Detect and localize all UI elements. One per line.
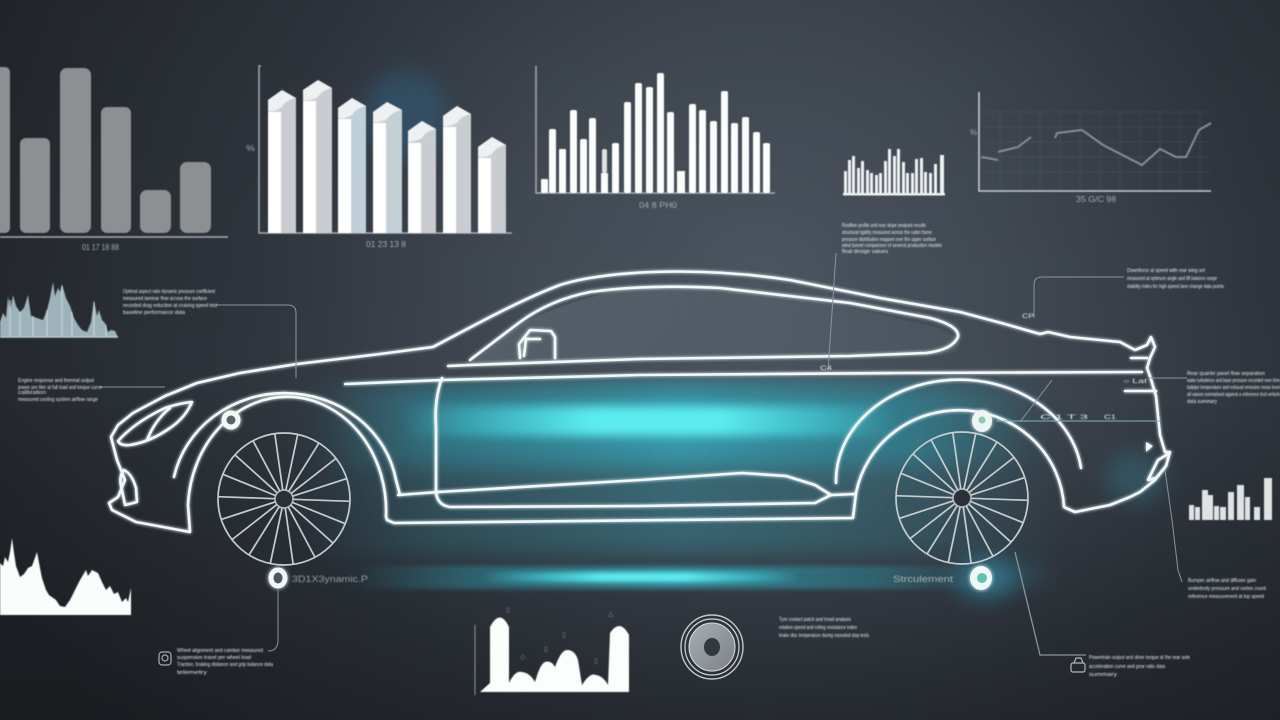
chart glow behind 3D bars [363, 70, 447, 160]
text block: bumper callout: Bumper airflow and diffuser gain [1188, 578, 1256, 584]
line chart with grid: 35 G/C 98 [1076, 195, 1117, 204]
rear details [1131, 357, 1147, 359]
hotspot: front arch [224, 413, 238, 427]
rear bumper glow [1105, 452, 1165, 504]
area chart: lower centre with icons: ▯ [544, 646, 548, 653]
text block: spoiler callout: measured at optimum angle and lift balance range [1127, 276, 1217, 282]
text block: bumper callout [1188, 578, 1266, 600]
text block: front wheel callout [177, 648, 273, 676]
area chart: lower centre with icons: ▯ [562, 632, 566, 639]
door [436, 378, 831, 507]
text block: rear wheel callout: summary [1089, 672, 1117, 678]
window [448, 287, 958, 366]
area chart: lower centre with icons: △ [608, 611, 614, 618]
text block: spoiler callout [1127, 268, 1224, 290]
area chart: lower left white [0, 538, 131, 615]
car outline [109, 272, 1170, 532]
bar chart: narrow white bars [536, 66, 775, 210]
bar chart: narrow white bars: 04 8 PH0 [639, 201, 678, 210]
text block: rear wheel callout [1089, 655, 1190, 678]
rear panel annotations: ○ Lat [1123, 379, 1148, 385]
car body teal glow [300, 376, 1060, 556]
bar chart: grey rounded bars [0, 67, 228, 252]
wheel labels [292, 574, 954, 584]
text block: roof callout: Roofline profile and rear slope analysis results [842, 223, 926, 229]
text block: hood callout [123, 289, 217, 316]
text block: left callout: power per liter at full load and torque curve [18, 385, 102, 391]
leader lines [100, 253, 1187, 655]
text block: left callout: Engine response and thermal output [18, 378, 94, 384]
text block: rear wheel callout: Powertrain output and drive torque at the rear axle [1089, 655, 1190, 661]
car window tint [470, 287, 960, 365]
front intake [120, 470, 137, 505]
icon: vehicle [1071, 658, 1085, 672]
text block: front wheel callout: suspension travel per wheel load [177, 655, 251, 661]
text block: spoiler callout: stability index for high speed lane change data points [1127, 284, 1224, 290]
area chart: lower centre with icons [475, 607, 629, 695]
front wheel arch [174, 393, 400, 495]
sill line [398, 473, 856, 495]
line chart with grid: % [970, 128, 977, 137]
text block: left callout [18, 378, 102, 403]
glow band under the car [350, 566, 990, 589]
side mirror [519, 330, 555, 358]
icon: rotor disc [681, 615, 743, 679]
text block: rear callout: Rear quarter panel flow separation [1187, 371, 1265, 377]
wheel labels: 3D1X3ynamic.P [292, 574, 368, 584]
belt line [345, 372, 1142, 384]
text block: hood callout: measured laminar flow across the surface [123, 296, 207, 302]
text block: front wheel callout: telemetry [177, 670, 207, 676]
text block: bottom centre callout: rotation speed and rolling resistance index [779, 625, 857, 631]
text block: bottom centre callout: Tyre contact patch and tread analysis [779, 617, 851, 623]
front wheel [218, 433, 350, 565]
text block: front wheel callout: Wheel alignment and camber measured [177, 648, 263, 654]
bar chart: white 3D columns: % [246, 144, 255, 153]
wheel glow at the rear [955, 558, 1050, 598]
bar chart: white 3D columns: 01 23 13 8 [366, 240, 407, 249]
text block: hood callout: recorded drag reduction at cruising speed test [123, 303, 217, 309]
text block: rear callout [1186, 371, 1280, 405]
rear panel annotations: CP [1022, 314, 1034, 320]
bar chart: small centre histogram [843, 149, 945, 196]
text block: bottom centre callout [779, 617, 869, 639]
text block: left callout: calibration [18, 390, 46, 396]
hotspot: rear arch [972, 410, 992, 432]
rear reflector [1146, 442, 1153, 452]
text block: roof callout: final design values [842, 249, 888, 255]
text block: left callout: measured cooling system airflow range [18, 397, 98, 403]
bar chart: white 3D columns [246, 66, 512, 249]
text block: hood callout: baseline performance data [123, 310, 185, 316]
rear wheel [896, 432, 1028, 564]
text block: rear wheel callout: acceleration curve and gear ratio data [1089, 664, 1165, 670]
text block: roof callout [841, 223, 942, 255]
text block: rear callout: data summary [1187, 399, 1217, 405]
text block: roof callout: structural rigidity measured across the cabin frame [842, 230, 932, 236]
area chart: lower centre with icons: ▯ [506, 607, 510, 614]
hotspot: front wheel [271, 570, 285, 586]
tail lamp [1148, 454, 1168, 480]
text block: front wheel callout: Traction, braking distance and grip balance data [177, 662, 273, 668]
rear panel annotations: C4 [820, 366, 833, 372]
right small histogram [1189, 478, 1272, 520]
text block: spoiler callout: Downforce at speed with rear wing set [1127, 268, 1205, 274]
text block: roof callout: pressure distribution mapped over the upper surface [842, 237, 936, 243]
headlight [118, 402, 192, 445]
text block: roof callout: wind tunnel comparison of several production models [841, 243, 942, 249]
rear wheel arch [836, 380, 1081, 483]
icon: gear [159, 652, 171, 665]
rear panel annotations: C1 [1104, 415, 1117, 421]
text block: hood callout: Optimal aspect ratio dynamic pressure coefficient [123, 289, 215, 295]
area chart: lower centre with icons: ▯ [594, 658, 598, 665]
rear panel annotations [820, 314, 1148, 421]
hotspot: rear wheel [970, 566, 992, 590]
area chart: left spectrum [0, 282, 118, 337]
area chart: lower centre with icons: ◇ [520, 654, 526, 661]
bar chart: grey rounded bars: 01 17 18 88 [82, 243, 119, 252]
text block: bottom centre callout: brake disc temperature during repeated stop tests [779, 633, 869, 639]
wheel labels: Strculement [893, 574, 954, 584]
rear panel annotations: C 1 T 3 [1040, 415, 1090, 421]
outer body silhouette [109, 272, 1170, 532]
text block: bumper callout: reference measurement at top speed [1188, 594, 1264, 600]
text block: bumper callout: underbody pressure and vortex count [1188, 586, 1266, 592]
line chart with grid [970, 92, 1211, 204]
